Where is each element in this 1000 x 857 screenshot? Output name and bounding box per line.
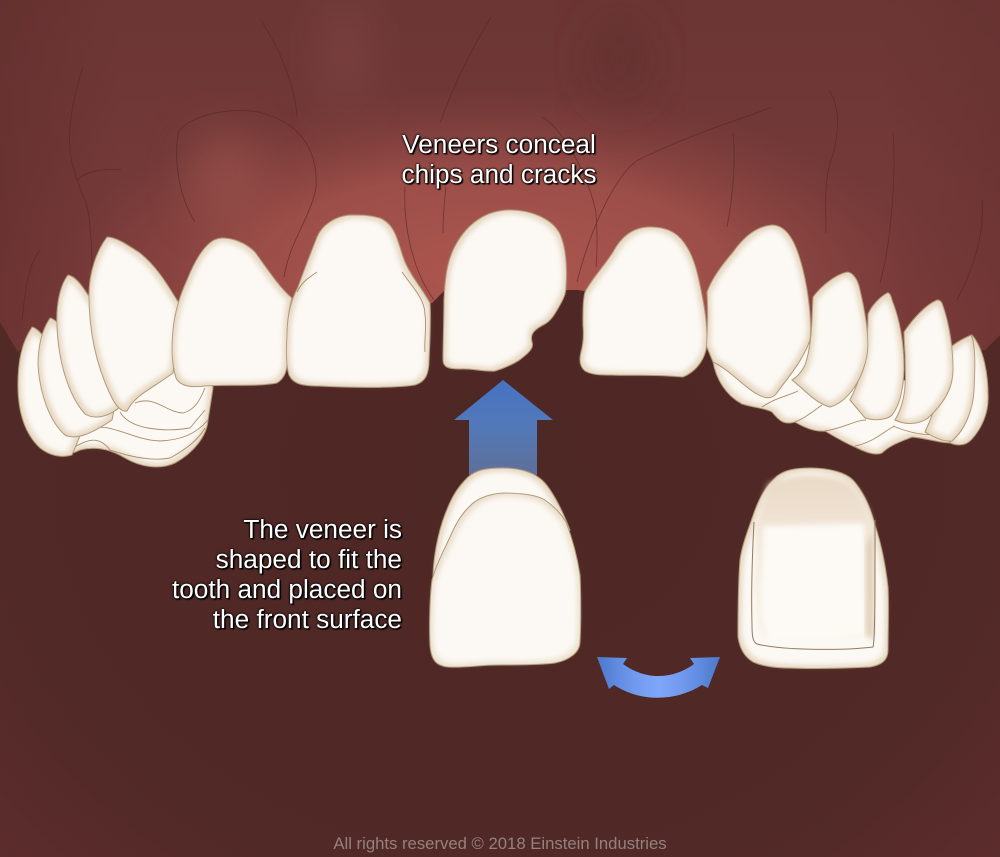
tooth with veneer, front view <box>430 468 581 667</box>
right molar <box>925 335 975 441</box>
caption: veneers conceal <box>400 129 598 191</box>
last right molar <box>950 335 988 445</box>
back surfaces of left teeth <box>35 320 213 467</box>
left first premolar <box>57 275 135 417</box>
chipped front tooth <box>443 210 566 371</box>
up arrow <box>454 380 553 475</box>
caption: veneer placement: The veneer is <box>243 514 402 544</box>
left second premolar <box>38 318 120 437</box>
right central incisor <box>580 227 707 377</box>
veneer inner white area <box>760 523 866 641</box>
caption: veneer placement <box>171 514 403 634</box>
prepared tooth behind veneer <box>433 468 570 610</box>
crack lines on central incisor <box>297 272 426 352</box>
right first premolar <box>850 293 904 420</box>
right canine <box>792 272 868 407</box>
veneer front <box>430 493 581 667</box>
caption: veneer placement: the front surface <box>213 604 402 634</box>
veneer back view <box>738 468 888 668</box>
caption: veneers conceal: chips and cracks <box>401 158 597 188</box>
caption: veneer placement: tooth and placed on <box>172 574 402 604</box>
right second premolar <box>895 300 953 424</box>
gums <box>0 0 1000 360</box>
caption: veneer placement: shaped to fit the <box>216 544 402 574</box>
left central incisor <box>286 215 430 387</box>
veneer outer shell <box>738 468 888 668</box>
veneer inner hollow <box>756 475 873 638</box>
left canine <box>89 237 180 411</box>
caption: veneers conceal: Veneers conceal <box>402 129 596 159</box>
upper left teeth <box>18 215 430 467</box>
copyright: All rights reserved © 2018 Einstein Industries <box>333 834 667 853</box>
upper right teeth <box>580 225 988 454</box>
curved double arrow <box>597 657 720 698</box>
veneer rim line <box>752 520 875 649</box>
left lateral incisor <box>172 238 292 387</box>
far left molar <box>18 327 95 456</box>
back surfaces of right teeth <box>713 340 955 454</box>
veneer inner shadow <box>866 530 874 640</box>
right lateral incisor <box>706 225 811 398</box>
